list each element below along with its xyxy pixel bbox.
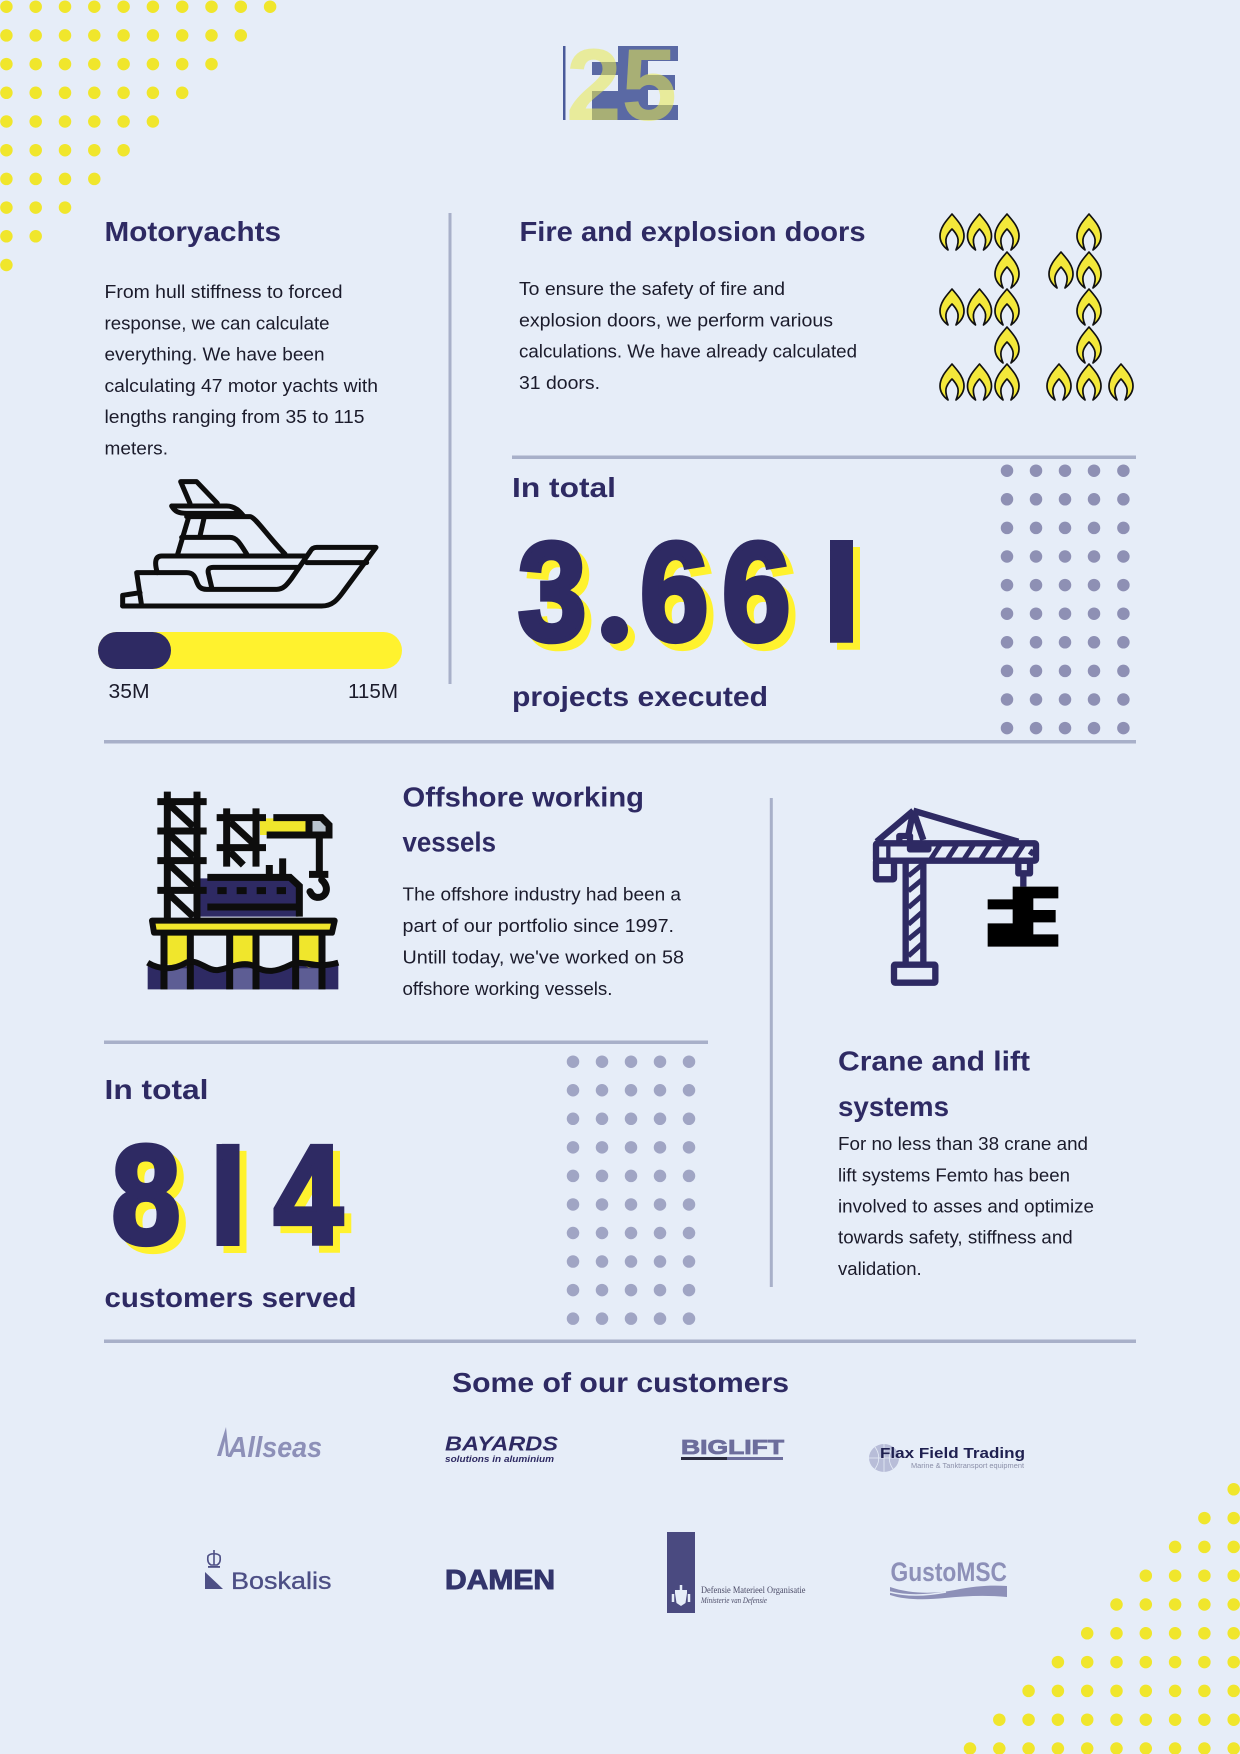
text block: motoryachts description: calculating 47 motor yachts with [104,375,378,396]
heading: motoryachts: Motoryachts [104,216,281,247]
icon: motoryacht [123,482,376,606]
text block: fire doors description: To ensure the safety of fire and [519,278,785,299]
text block: crane description: validation. [838,1258,922,1279]
logo: Boskalis: Boskalis [231,1568,332,1595]
text block: offshore description: offshore working vessels. [402,978,612,999]
dots: grey grid customers [573,1062,689,1320]
panel: customers total [104,1062,689,1320]
text block: motoryachts description: lengths ranging from 35 to 115 [104,406,364,427]
dots: top left yellow triangle [6,7,271,265]
text block: motoryachts description: meters. [104,438,168,458]
text block: crane description: For no less than 38 crane and [838,1133,1088,1154]
label: in total: In total [104,1074,208,1105]
heading: offshore working vessels [402,782,644,858]
label: 115M: 115M [348,681,398,703]
heading: crane and lift systems [838,1046,1030,1122]
logo: Defensie Materieel Organisatie: Defensie Materieel Organisatie [701,1585,806,1595]
divider: above customers [104,1340,1136,1343]
panel: offshore working vessels [148,782,684,999]
heading: some of our customers: Some of our customers [452,1367,789,1398]
text block: motoryachts description: From hull stiffness to forced [104,281,342,302]
label: projects executed: projects executed [512,681,768,712]
heading: crane and lift systems: systems [838,1091,949,1122]
dots: grey grid projects [1007,471,1123,729]
label: customers served: customers served [104,1282,356,1313]
heading: offshore working vessels: vessels [402,827,496,858]
text block: offshore description: The offshore industry had been a [402,884,682,905]
logo: Flax Field Trading: Marine & Tanktransport equipment [911,1463,1024,1470]
logo: Bayards: solutions in aluminium [445,1454,555,1465]
divider: above projects total [512,456,1136,459]
text block: crane description: towards safety, stiffness and [838,1227,1073,1248]
big number: 3.661: 3.661 [518,514,875,670]
panel: crane and lift systems [838,811,1094,1279]
logo: Bayards [445,1434,559,1465]
logo: 25 anniversary mark: 25 [566,28,677,142]
logo: Flax Field Trading: Flax Field Trading [880,1446,1025,1462]
text block: offshore description [402,884,684,999]
logo: Boskalis [205,1550,332,1595]
range bar: 35M to 115M [98,632,402,669]
logo: Allseas: Allseas [227,1432,322,1464]
divider: above customers total [104,1040,708,1044]
heading: fire and explosion doors: Fire and explosion doors [520,216,866,247]
text block: offshore description: Untill today, we've worked on 58 [402,946,684,968]
divider: vertical motoryachts [448,213,452,684]
divider: middle horizontal [104,740,1136,744]
text block: fire doors description: calculations. We have already calculated [519,341,857,362]
text block: crane description [838,1133,1094,1279]
text block: motoryachts description: response, we can calculate [104,312,330,333]
logo: Damen: DAMEN [445,1564,555,1595]
text block: offshore description: part of our portfolio since 1997. [402,915,674,936]
logo: BigLift: BIGLIFT [681,1437,784,1459]
panel: projects total [512,471,1123,729]
dots: bottom right yellow triangle [969,1489,1234,1748]
logo: GustoMSC [890,1557,1007,1599]
big number: 814 [113,1142,352,1254]
text block: motoryachts description [104,281,378,458]
heading: offshore working vessels: Offshore working [402,782,644,813]
logo: Flax Field Trading [869,1444,1025,1472]
text block: fire doors description: explosion doors, we perform various [519,309,833,330]
heading: crane and lift systems: Crane and lift [838,1046,1030,1077]
divider: vertical crane [770,798,773,1287]
logo: Bayards: BAYARDS [445,1434,559,1456]
icon: flames forming 31 [940,214,1133,400]
text block: fire doors description [519,278,857,393]
logo: GustoMSC: GustoMSC [890,1557,1007,1587]
logo: Defensie Materieel Organisatie [667,1532,806,1613]
text block: fire doors description: 31 doors. [519,372,600,393]
logo: Defensie Materieel Organisatie: Ministerie van Defensie [700,1595,767,1605]
panel: motoryachts [98,216,402,703]
label: 35M: 35M [108,681,150,703]
big number: 814: 814 [112,1117,343,1273]
text block: crane description: involved to asses and optimize [838,1196,1094,1217]
big number: 3.661 [518,540,860,652]
label: in total: In total [512,472,616,503]
text block: motoryachts description: everything. We have been [104,344,324,365]
text block: crane description: lift systems Femto has been [838,1164,1070,1186]
icon: tower crane [876,811,1058,983]
icon: offshore platform [148,792,338,989]
panel: fire and explosion doors [519,214,1133,400]
